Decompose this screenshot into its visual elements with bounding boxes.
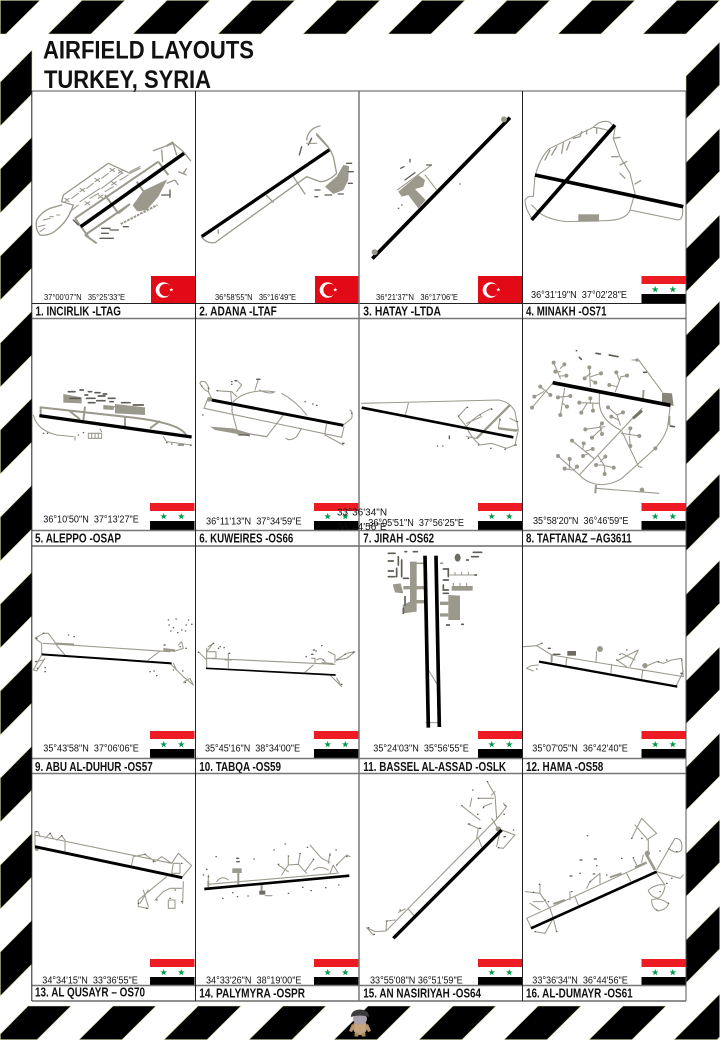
runway [81,153,184,227]
table grid [32,91,686,1001]
label: 15. AN NASIRIYAH -OS64 [363,987,481,1001]
flag: Turkey [478,276,522,303]
flag: Syria [478,503,522,530]
flag: Syria [150,503,194,530]
label: 4. MINAKH -OS71 [526,304,607,318]
hazard stripes: bottom band [0,994,720,1040]
map: An Nasiriyah airfield [367,782,515,938]
label: 12. HAMA -OS58 [526,760,603,774]
flag: Syria [314,731,358,758]
panel: 15 An Nasiriyah [363,782,522,1001]
map: Incirlik airfield [36,142,191,243]
panel: 3 Hatay [363,116,522,318]
title [43,36,254,94]
title: TURKEY, SYRIA [44,66,211,94]
map: Aleppo airfield [33,390,192,445]
panel: 9 Abu al-Duhur [33,619,194,774]
flag: Syria [642,959,686,986]
stray coordinates text overflowing: 33°36'34"N [337,508,387,518]
label: 2. ADANA -LTAF [199,304,277,318]
label: 3. HATAY -LTDA [363,304,441,318]
coordinates: 36°05'51"N 37°56'25"E [368,518,464,529]
coordinates: 36°11'13"N 37°34'59"E [206,517,302,528]
panel: 7 Jirah [362,400,522,546]
label: 10. TABQA -OS59 [199,760,281,774]
map: Bassel Al-Assad airfield [388,552,482,728]
map: Hama airfield [523,643,683,687]
map: Al Qusayr airfield [35,832,192,908]
label: 11. BASSEL AL-ASSAD -OSLK [363,760,506,774]
panel: 12 Hama [523,643,686,774]
stray coordinates text overflowing [337,508,387,533]
label: 5. ALEPPO -OSAP [35,532,121,546]
panel: 8 Taftanaz [526,351,686,546]
title: AIRFIELD LAYOUTS [43,36,254,64]
panel: 11 Bassel Al-Assad [363,552,522,774]
label: 16. AL-DUMAYR -OS61 [526,987,633,1001]
coordinates: 34°34'15"N 33°36'55"E [42,976,138,987]
map: Palymyra airfield [203,844,350,898]
flag: Syria [478,731,522,758]
panel: 4 Minakh [525,121,686,318]
flag: Syria [642,503,686,530]
label: 8. TAFTANAZ –AG3611 [526,532,632,546]
panel: 1 Incirlik [36,142,195,318]
map: Kuweires airfield [200,379,352,445]
flag: Turkey [151,276,195,303]
label: 13. AL QUSAYR – OS70 [35,986,145,1000]
panel: 2 Adana [199,126,359,318]
coordinates: 33°36'34"N 36°44'56"E [532,976,628,987]
coordinates: 36°10'50"N 37°13'27"E [43,515,139,526]
panel: 13 Al Qusayr [35,832,194,1000]
coordinates: 37°00'07"N 35°25'33"E [44,293,125,302]
map: Taftanaz airfield [530,351,674,493]
label: 14. PALYMYRA -OSPR [199,987,305,1001]
flag: Syria [150,959,194,986]
panel: 14 Palmyra [199,844,358,1001]
flag: Syria [642,276,686,303]
coordinates: 36°31'19"N 37°02'28"E [531,290,627,301]
label: 7. JIRAH -OS62 [363,532,434,546]
map: Adana airfield [202,126,353,243]
stray coordinates text overflowing: 36°44'56"E [337,522,387,533]
coordinates: 36°58'55"N 35°16'49"E [215,293,296,302]
panel: 16 Al-Dumayr [525,818,686,1001]
flag: Turkey [315,276,359,303]
flag: Syria [478,959,522,986]
panel: 6 Kuweires [199,379,358,546]
coordinates: 34°33'26"N 38°19'00"E [206,976,302,987]
flag: Syria [314,959,358,986]
label: 6. KUWEIRES -OS66 [199,532,293,546]
map: Tabqa airfield [198,643,355,687]
map: Al-Dumayr airfield [525,818,683,933]
hazard stripes: right band [686,42,720,983]
flag: Syria [150,731,194,758]
flag: Syria [642,731,686,758]
map: Abu al-Duhur airfield [33,619,193,685]
coordinates: 35°07'05"N 36°42'40"E [532,744,628,755]
map: Jirah airfield [362,400,518,449]
panel: 10 Tabqa [198,643,358,774]
flag: Syria [314,503,358,530]
coordinates: 36°21'37"N 36°17'06"E [376,293,458,302]
panel: 5 Aleppo [33,390,194,546]
label: 9. ABU AL-DUHUR -OS57 [35,760,153,774]
hazard stripes: top band [0,0,720,34]
hazard stripes: left band [0,50,32,996]
map: Hatay airfield [372,116,510,259]
coordinates: 35°58'20"N 36°46'59"E [533,516,629,527]
coordinates: 33°55'08"N 36°51'59"E [370,976,463,987]
coordinates: 35°45'16"N 38°34'00"E [205,744,300,755]
coordinates: 35°24'03"N 35°56'55"E [373,744,469,755]
coordinates: 35°43'58"N 37°06'06"E [43,744,139,755]
icon: mascot [349,1010,371,1036]
map: Minakh airfield [525,121,683,222]
label: 1. INCIRLIK -LTAG [36,304,121,318]
